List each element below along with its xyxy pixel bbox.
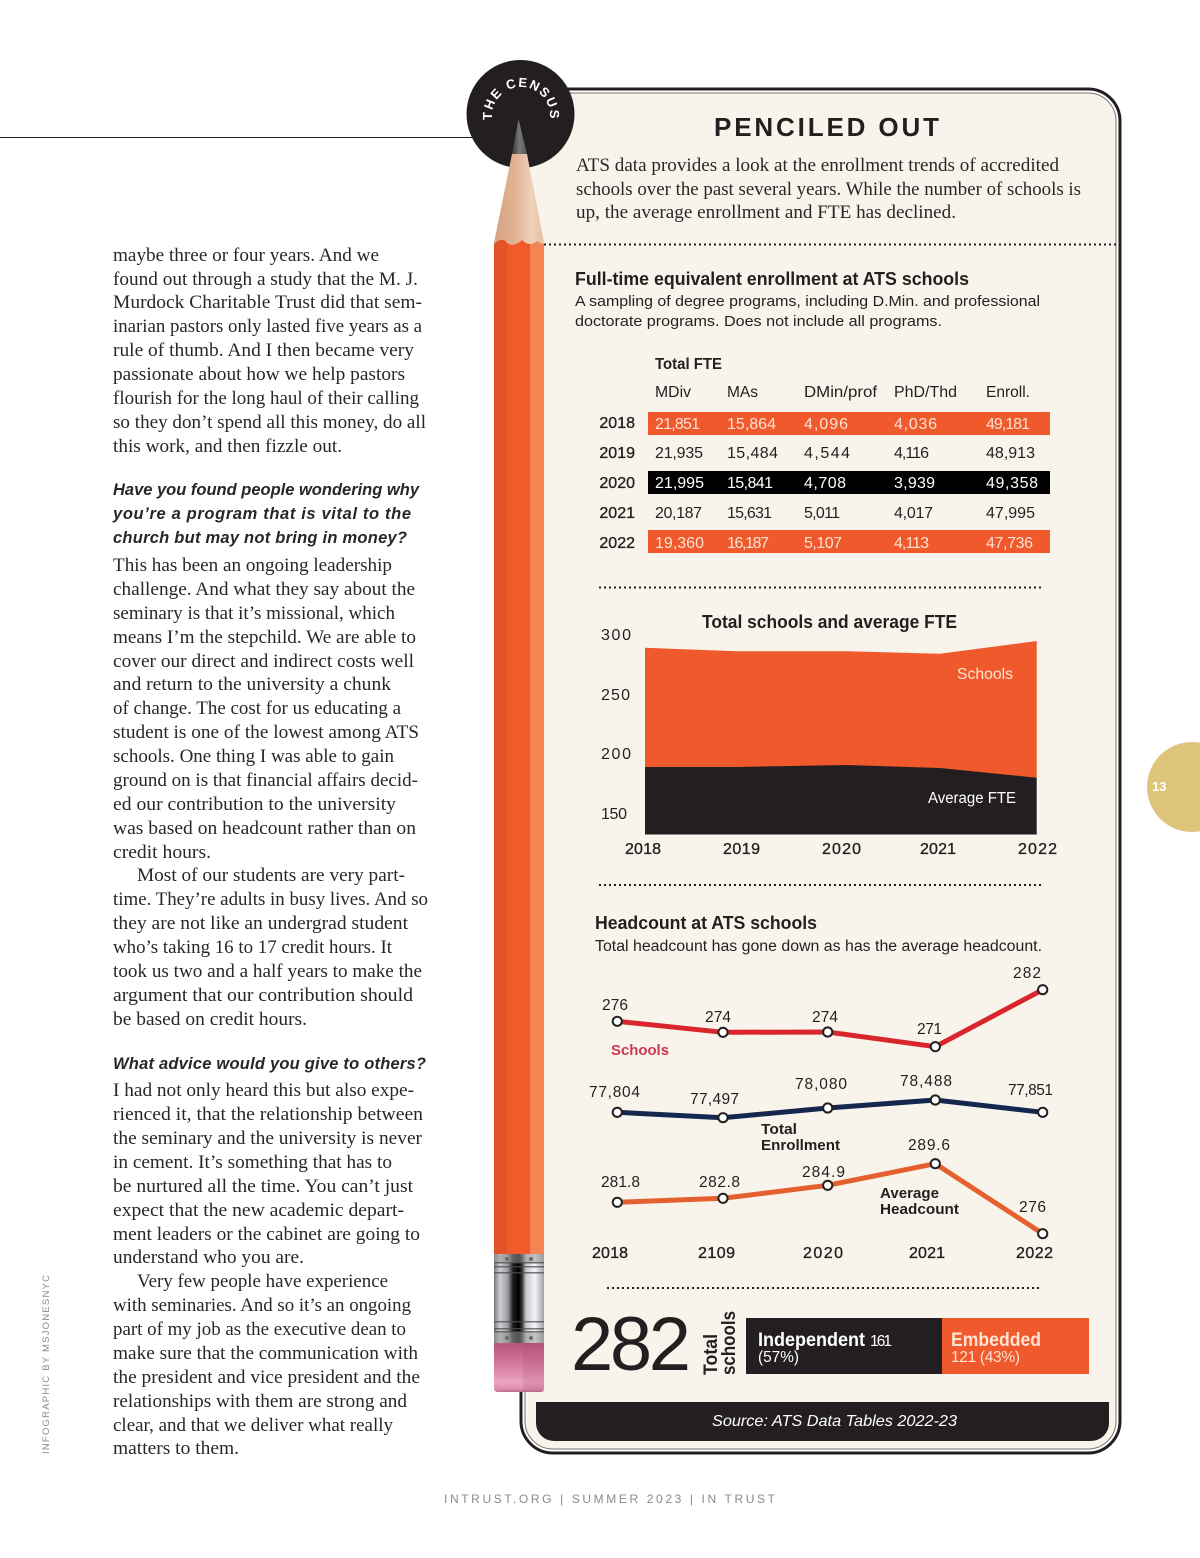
question heading: vital program [112, 481, 420, 547]
series: total enrollment [589, 1073, 1053, 1154]
paragraph: leadership challenge: ground on is that financial affairs decid- [113, 770, 418, 791]
line chart description: Total headcount has gone down as has the average headcount. [595, 938, 1042, 955]
total schools callout [571, 1302, 1089, 1387]
series: schools: 274 [812, 1009, 838, 1026]
table row 2020: 21,995 [655, 475, 704, 492]
source bar [536, 1402, 1109, 1441]
table row 2019: 4,116 [894, 445, 929, 462]
x axis years: 2109 [698, 1245, 735, 1262]
question heading: vital program: you’re a program that is vital to the [112, 505, 411, 523]
table row 2022: 47,736 [986, 535, 1033, 552]
series: schools: 276 [602, 997, 628, 1014]
series: average headcount: 282.8 [699, 1174, 740, 1191]
page number tab: 13 [1152, 779, 1166, 794]
table row 2018: 49,181 [986, 416, 1030, 433]
paragraph: part-time students: who’s taking 16 to 17 credit hours. It [113, 937, 393, 958]
paragraph: leadership challenge: of change. The cost for us educating a [113, 698, 402, 719]
article text column [112, 245, 428, 1459]
paragraph: few people have experience: Very few people have experience [137, 1271, 388, 1292]
table row 2018: 21,851 [655, 416, 700, 433]
table description [575, 293, 1040, 330]
table row 2020: 49,358 [986, 475, 1038, 492]
badge: the census: THE CENSUS [482, 78, 560, 120]
series: total enrollment: 77,497 [690, 1091, 739, 1108]
table row 2018 [599, 412, 1050, 435]
table row 2019 [599, 445, 1035, 462]
paragraph: leadership challenge: was based on headcount rather than on [113, 818, 417, 839]
badge: the census [466, 60, 574, 168]
paragraph: part-time students: be based on credit hours. [113, 1009, 307, 1030]
average FTE area label: Average FTE [928, 790, 1016, 807]
series: schools: 271 [917, 1021, 942, 1038]
x axis labels: 2022 [1018, 841, 1057, 858]
table column headers: MAs [727, 384, 758, 401]
series: schools: Schools [611, 1042, 669, 1059]
paragraph: part-time students: they are not like an undergrad student [113, 913, 409, 934]
series: average headcount: 281.8 [601, 1174, 640, 1191]
table row 2022: 19,360 [655, 535, 704, 552]
paragraph: leadership challenge: cover our direct and indirect costs well [113, 651, 414, 672]
vertical infographic credit: INFOGRAPHIC BY MSJONESNYC [41, 1275, 52, 1454]
pencil body [494, 240, 544, 1254]
series: average headcount [601, 1137, 1047, 1238]
paragraph: seminary and university: understand who you are. [113, 1247, 304, 1268]
y axis labels [601, 627, 631, 823]
series: schools: 282 [1013, 965, 1041, 982]
series: average headcount: Average [880, 1185, 939, 1202]
paragraph: leadership challenge: schools. One thing I was able to gain [113, 746, 394, 767]
table column headers: Enroll. [986, 384, 1030, 401]
table row 2018: 15,864 [727, 416, 776, 433]
average FTE area [645, 765, 1037, 834]
table row 2021 [599, 505, 1035, 522]
series: schools [602, 965, 1047, 1059]
paragraph: opening answer: inarian pastors only lasted five years as a [113, 316, 423, 337]
paragraph: part-time students [113, 865, 428, 1030]
series: schools: 274 [705, 1009, 731, 1026]
paragraph: few people have experience: with seminaries. And so it’s an ongoing [113, 1295, 411, 1316]
series: total enrollment: 78,080 [795, 1076, 847, 1093]
paragraph: leadership challenge: credit hours. [113, 842, 211, 863]
independent bar: (57%) [758, 1349, 799, 1366]
paragraph: leadership challenge: student is one of the lowest among ATS [113, 722, 419, 743]
series: total enrollment: 77,851 [1008, 1082, 1053, 1099]
table row 2022: 16,187 [727, 535, 769, 552]
chart title: Total schools and average FTE [702, 612, 957, 632]
paragraph: seminary and university: the seminary and the university is never [113, 1128, 423, 1149]
table column headers: DMin/prof [804, 384, 878, 401]
paragraph: leadership challenge: means I’m the stepchild. We are able to [113, 627, 416, 648]
series: average headcount: 289.6 [908, 1137, 950, 1154]
paragraph: opening answer: passionate about how we help pastors [113, 364, 405, 385]
table row 2022: 4,113 [894, 535, 929, 552]
paragraph: leadership challenge: and return to the university a chunk [113, 674, 392, 695]
table row 2019: 2019 [599, 445, 635, 462]
line chart heading: Headcount at ATS schools [595, 913, 817, 933]
source bar: Source: ATS Data Tables 2022-23 [712, 1413, 957, 1430]
paragraph: part-time students: took us two and a half years to make the [113, 961, 422, 982]
table row 2020: 15,841 [727, 475, 773, 492]
total schools label: Total [701, 1334, 722, 1375]
embedded bar: 121 (43%) [951, 1349, 1020, 1366]
table column headers: Total FTE [655, 356, 722, 373]
table row 2021: 2021 [599, 505, 635, 522]
pencil eraser [494, 1343, 544, 1392]
paragraph: few people have experience: clear, and that we deliver what really [113, 1415, 393, 1436]
paragraph: opening answer: flourish for the long haul of their calling [113, 388, 419, 409]
paragraph: part-time students: argument that our contribution should [113, 985, 414, 1006]
paragraph: leadership challenge: challenge. And what they say about the [113, 579, 415, 600]
paragraph: opening answer: rule of thumb. And I then became very [113, 340, 414, 361]
paragraph: seminary and university: be nurtured all the time. You can’t just [113, 1176, 414, 1197]
pencil graphite [512, 119, 527, 154]
paragraph: opening answer [113, 245, 426, 457]
x axis years: 2018 [592, 1245, 628, 1262]
table row 2020: 3,939 [894, 475, 935, 492]
area chart: total schools and average FTE [601, 612, 1057, 858]
paragraph: leadership challenge: seminary is that it’s missional, which [113, 603, 395, 624]
paragraph: leadership challenge [113, 555, 419, 863]
y axis labels: 300 [601, 627, 631, 644]
schools area label: Schools [957, 666, 1013, 683]
table column headers: PhD/Thd [894, 384, 957, 401]
series: total enrollment: 77,804 [589, 1084, 640, 1101]
question heading: advice: What advice would you give to others? [113, 1055, 426, 1073]
page number tab [1147, 742, 1200, 832]
paragraph: part-time students: Most of our students are very part- [137, 865, 405, 886]
x axis years: 2021 [909, 1245, 945, 1262]
x axis labels: 2019 [723, 841, 760, 858]
table row 2019: 48,913 [986, 445, 1035, 462]
paragraph: opening answer: found out through a study that the M. J. [113, 269, 418, 290]
series: total enrollment: Enrollment [761, 1137, 840, 1154]
paragraph: few people have experience: relationships with them are strong and [113, 1391, 407, 1412]
paragraph: opening answer: maybe three or four years. And we [113, 245, 379, 266]
page footer: INTRUST.ORG | SUMMER 2023 | IN TRUST [444, 1492, 776, 1506]
header rule [0, 137, 480, 138]
pencil ferrule [494, 1254, 544, 1343]
line chart: headcount at ATS schools [589, 913, 1053, 1262]
paragraph: opening answer: this work, and then fizzle out. [113, 436, 342, 457]
table row 2021: 4,017 [894, 505, 933, 522]
paragraph: few people have experience: matters to them. [113, 1438, 239, 1459]
total schools label [701, 1311, 740, 1375]
table row 2018: 4,096 [804, 416, 848, 433]
paragraph: few people have experience: make sure that the communication with [113, 1343, 418, 1364]
question heading: vital program: Have you found people wondering why [113, 481, 420, 499]
paragraph: seminary and university: ment leaders or the cabinet are going to [113, 1224, 420, 1245]
paragraph: seminary and university: I had not only heard this but also expe- [113, 1080, 414, 1101]
y axis labels: 200 [601, 746, 631, 763]
x axis labels: 2021 [920, 841, 956, 858]
paragraph: seminary and university: expect that the new academic depart- [113, 1200, 404, 1221]
panel title: PENCILED OUT [714, 112, 939, 142]
table row 2021: 5,011 [804, 505, 840, 522]
series: total enrollment: 78,488 [900, 1073, 952, 1090]
paragraph: seminary and university: rienced it, that the relationship between [113, 1104, 424, 1125]
pencil wood tip [494, 154, 544, 250]
table row 2020 [599, 471, 1050, 494]
paragraph: opening answer: so they don’t spend all this money, do all [113, 412, 426, 433]
table row 2022: 2022 [599, 535, 635, 552]
table row 2022: 5,107 [804, 535, 842, 552]
paragraph: leadership challenge: ed our contribution to the university [113, 794, 397, 815]
table heading: Full-time equivalent enrollment at ATS schools [575, 268, 969, 289]
x axis labels [625, 841, 1057, 858]
table column headers [655, 356, 1030, 401]
table row 2020: 4,708 [804, 475, 846, 492]
paragraph: leadership challenge: This has been an ongoing leadership [113, 555, 392, 576]
series: average headcount: 284.9 [802, 1164, 845, 1181]
panel: penciled out [521, 89, 1120, 1453]
table column headers: MDiv [655, 384, 691, 401]
table row 2022 [599, 530, 1050, 553]
paragraph: seminary and university [113, 1080, 424, 1268]
table row 2018: 4,036 [894, 416, 937, 433]
table row 2020: 2020 [599, 475, 635, 492]
schools area [645, 641, 1037, 780]
independent bar [746, 1318, 942, 1374]
series: average headcount: Headcount [880, 1201, 959, 1218]
table row 2021: 15,631 [727, 505, 772, 522]
panel intro text: schools over the past several years. While the number of schools is [576, 179, 1081, 200]
embedded bar [942, 1318, 1089, 1374]
table row 2021: 47,995 [986, 505, 1035, 522]
x axis labels: 2020 [822, 841, 861, 858]
independent bar: 161 [870, 1333, 892, 1350]
table row 2019: 21,935 [655, 445, 703, 462]
panel intro text: up, the average enrollment and FTE has declined. [576, 202, 956, 223]
paragraph: part-time students: time. They’re adults in busy lives. And so [113, 889, 428, 910]
x axis years: 2022 [1016, 1245, 1053, 1262]
table row 2021: 20,187 [655, 505, 702, 522]
panel intro text [576, 155, 1081, 223]
icon: pencil [494, 119, 544, 1392]
table description: doctorate programs. Does not include all programs. [575, 313, 942, 330]
big number 282: 282 [571, 1302, 691, 1387]
series: average headcount: 276 [1019, 1199, 1046, 1216]
section: full-time equivalent table [575, 268, 1050, 553]
paragraph: few people have experience [113, 1271, 420, 1459]
paragraph: few people have experience: the president and vice president and the [113, 1367, 420, 1388]
table row 2019: 15,484 [727, 445, 778, 462]
y axis labels: 250 [601, 687, 630, 704]
table row 2019: 4,544 [804, 445, 850, 462]
panel intro text: ATS data provides a look at the enrollment trends of accredited [576, 155, 1059, 176]
x axis years: 2020 [803, 1245, 843, 1262]
table row 2018: 2018 [599, 415, 635, 432]
table description: A sampling of degree programs, including D.Min. and professional [575, 293, 1040, 310]
paragraph: seminary and university: in cement. It’s something that has to [113, 1152, 392, 1173]
y axis labels: 150 [601, 806, 627, 823]
independent bar: Independent [758, 1330, 866, 1351]
paragraph: few people have experience: part of my job as the executive dean to [113, 1319, 406, 1340]
x axis labels: 2018 [625, 841, 661, 858]
paragraph: opening answer: Murdock Charitable Trust did that sem- [113, 292, 422, 313]
series: total enrollment: Total [761, 1121, 797, 1138]
embedded bar: Embedded [951, 1330, 1041, 1351]
question heading: vital program: church but may not bring in money? [113, 529, 407, 547]
x axis years [592, 1245, 1053, 1262]
total schools label: schools [719, 1311, 740, 1375]
